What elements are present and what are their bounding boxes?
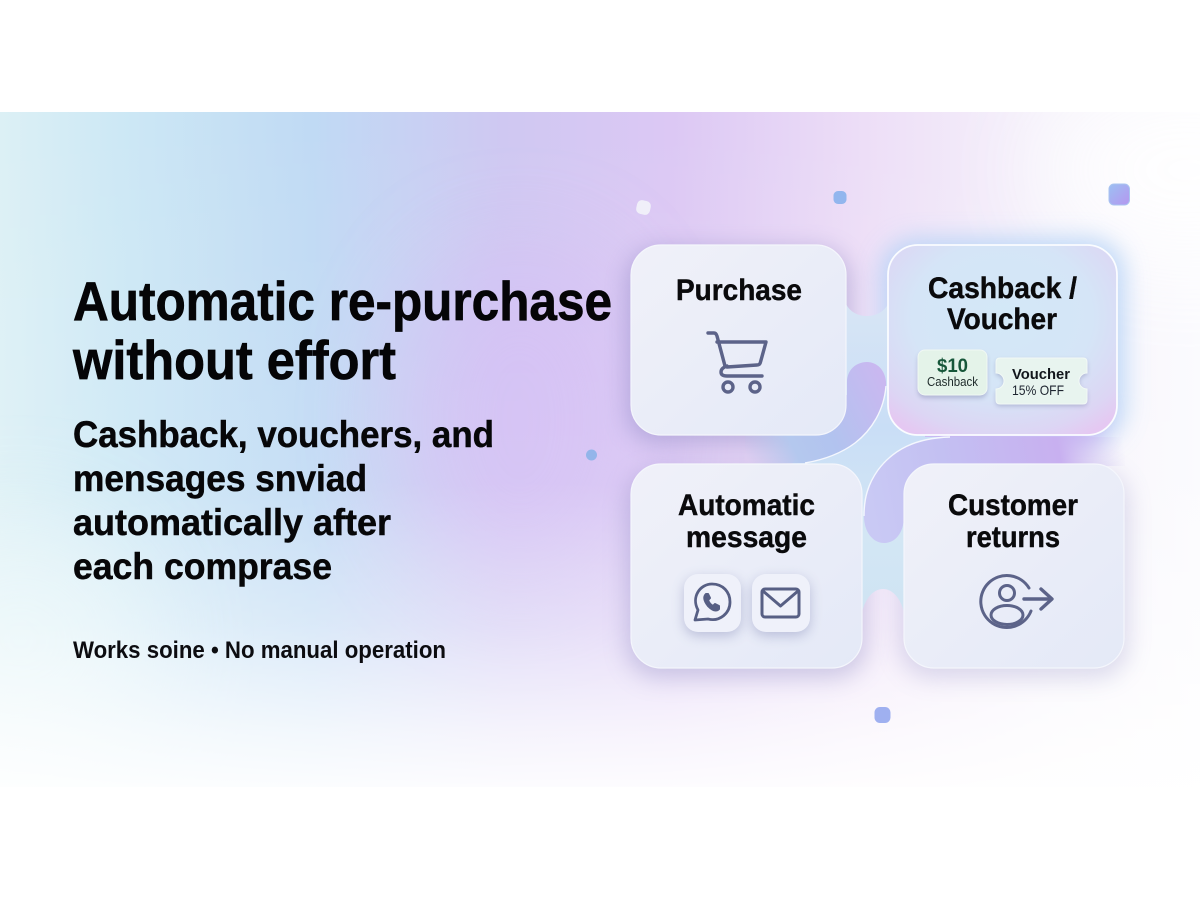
heading: customer returns: Customer: [948, 489, 1078, 522]
gradient background band: [0, 112, 1126, 760]
heading: automatic message: message: [686, 521, 807, 554]
badge: voucher ticket: Voucher: [1012, 366, 1070, 383]
icon: envelope tile: [752, 574, 810, 636]
heading: purchase: Purchase: [676, 274, 802, 307]
infographic canvas: [0, 112, 1148, 760]
badge: $10 cashback: [918, 350, 987, 398]
decorative floating squares and dots: [586, 184, 1130, 723]
heading: cashback voucher: Voucher: [947, 303, 1057, 336]
footer note: Works soine • No manual operation: [73, 637, 446, 664]
badge: voucher ticket: [996, 358, 1087, 406]
connector network between cards: [745, 238, 1125, 612]
connector: upper-right blob: [864, 437, 1125, 543]
connector glow: cashback card halo: [880, 238, 1125, 443]
panel: automatic message: [631, 464, 862, 668]
icon: shopping cart: [708, 333, 766, 392]
subtitle text block: Cashback, vouchers, and: [73, 414, 494, 455]
heading: automatic message: [678, 489, 815, 554]
title: without effort: [72, 329, 396, 391]
title: [72, 270, 612, 391]
heading: cashback voucher: Cashback /: [928, 272, 1078, 305]
badge: $10 cashback: $10: [937, 356, 968, 377]
card shadows: [627, 249, 1128, 678]
connector: lower-left blob highlight: [805, 386, 886, 463]
connector: upper-right blob highlight: [864, 437, 950, 516]
subtitle text block: each comprase: [73, 546, 332, 587]
panel: cashback voucher: [888, 245, 1117, 435]
connector: lower-left blob: [745, 362, 886, 464]
heading: cashback voucher: [928, 272, 1078, 336]
connector: light channel with concave ends: [790, 304, 960, 612]
icon: returning customer: [981, 576, 1052, 628]
heading: automatic message: Automatic: [678, 489, 815, 522]
icon: whatsapp tile: [684, 574, 741, 636]
heading: customer returns: returns: [966, 521, 1060, 554]
title: Automatic re-purchase: [73, 270, 612, 332]
badge: voucher ticket: 15% OFF: [1012, 382, 1064, 398]
panel: purchase: [631, 245, 846, 435]
badge: $10 cashback: Cashback: [927, 375, 979, 389]
subtitle text block: automatically after: [73, 502, 391, 543]
subtitle text block: mensages snviad: [73, 458, 367, 499]
heading: customer returns: [948, 489, 1078, 554]
subtitle text block: [73, 414, 494, 587]
panel: customer returns: [904, 464, 1124, 668]
